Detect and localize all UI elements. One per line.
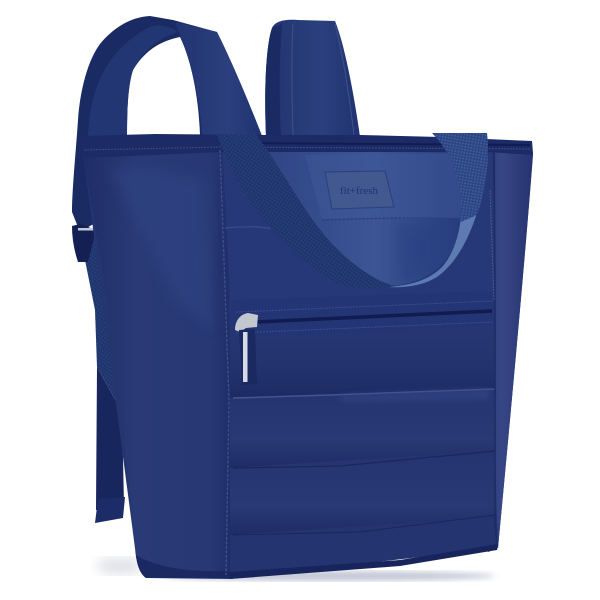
back shoulder strap (right) xyxy=(265,20,360,137)
bottom edge xyxy=(230,544,498,579)
right panel seam xyxy=(490,190,494,300)
pocket right edge xyxy=(494,150,497,546)
side seam xyxy=(220,150,229,575)
zipper band xyxy=(231,291,495,338)
bag silhouette base xyxy=(82,140,533,579)
bag interior quilted panel xyxy=(225,152,462,286)
zipper pull xyxy=(235,313,258,385)
logo patch: fit+fresh xyxy=(340,185,378,197)
handle right top xyxy=(432,133,488,222)
ground shadow xyxy=(165,571,495,581)
ground shadow left xyxy=(96,558,144,574)
lower hanging strap xyxy=(80,235,125,523)
strap front face xyxy=(176,22,262,136)
buckle xyxy=(72,224,97,262)
handle left band xyxy=(217,134,395,289)
bag right side panel xyxy=(488,150,533,552)
top rim xyxy=(80,134,533,158)
carry handle webbing xyxy=(217,133,488,289)
back shoulder strap loop (left) xyxy=(72,16,262,232)
bag side panel xyxy=(82,145,234,578)
handle underside xyxy=(385,213,477,287)
strap inner padding xyxy=(88,26,178,136)
bag front panel xyxy=(222,145,495,308)
logo patch xyxy=(325,171,394,209)
quilted puffed lower panels xyxy=(230,326,498,578)
